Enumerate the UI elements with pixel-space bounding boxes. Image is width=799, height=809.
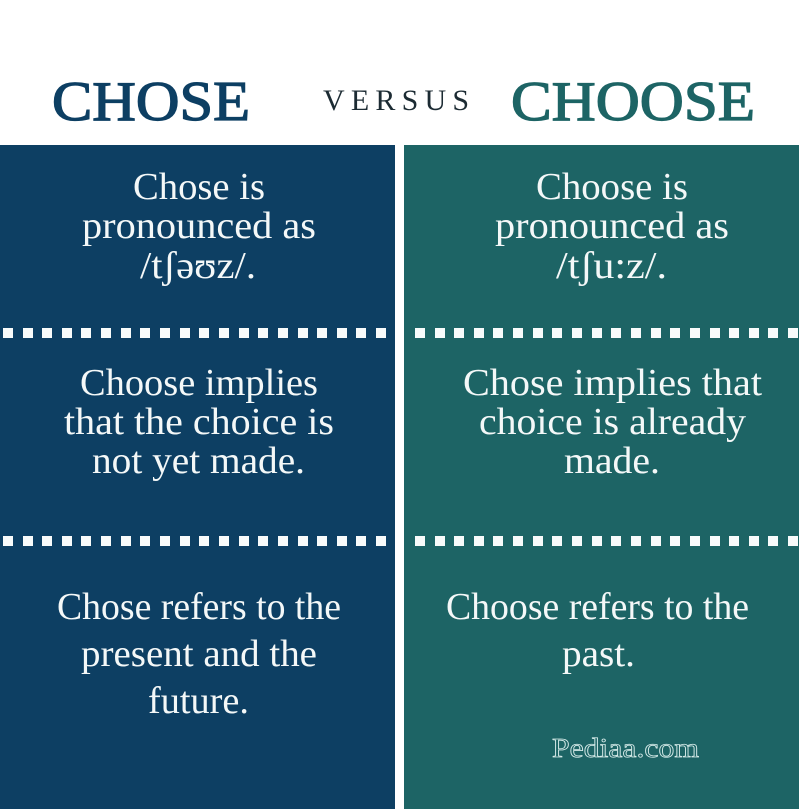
text: choose pronunciation: pronounced as [495,205,729,247]
header: titles [52,71,755,133]
label: VERSUS: VERSUS [323,84,469,117]
text: choose pronunciation: Choose is [536,166,688,208]
text: chose tense: future. [148,680,249,722]
text: choose implication: made. [564,440,660,482]
text: chose pronunciation [82,166,316,287]
text: choose tense [446,586,749,675]
text: chose implication [64,362,334,482]
text: choose tense: Choose refers to the [446,586,749,628]
title: CHOSE: CHOSE [52,71,250,133]
text: chose tense: present and the [81,633,317,675]
panel: choose column [404,145,799,809]
text: chose pronunciation: Chose is [133,166,265,208]
title: CHOOSE: CHOOSE [511,71,755,133]
text: choose implication [463,362,762,482]
logo: Pediaa.com: Pediaa.com [552,733,699,763]
text: choose pronunciation [495,166,729,287]
text: chose pronunciation: /tʃəʊz/. [140,245,256,287]
text: choose implication: choice is already [479,401,746,443]
text: chose tense [57,586,341,722]
text: chose implication: that the choice is [64,401,334,443]
panel: chose column [0,145,395,809]
text: chose implication: not yet made. [92,440,305,482]
text: choose pronunciation: /tʃu:z/. [556,245,667,287]
text: choose tense: past. [562,633,635,675]
text: choose implication: Chose implies that [463,362,762,404]
text: chose pronunciation: pronounced as [82,205,316,247]
text: chose tense: Chose refers to the [57,586,341,628]
text: chose implication: Choose implies [80,362,318,404]
